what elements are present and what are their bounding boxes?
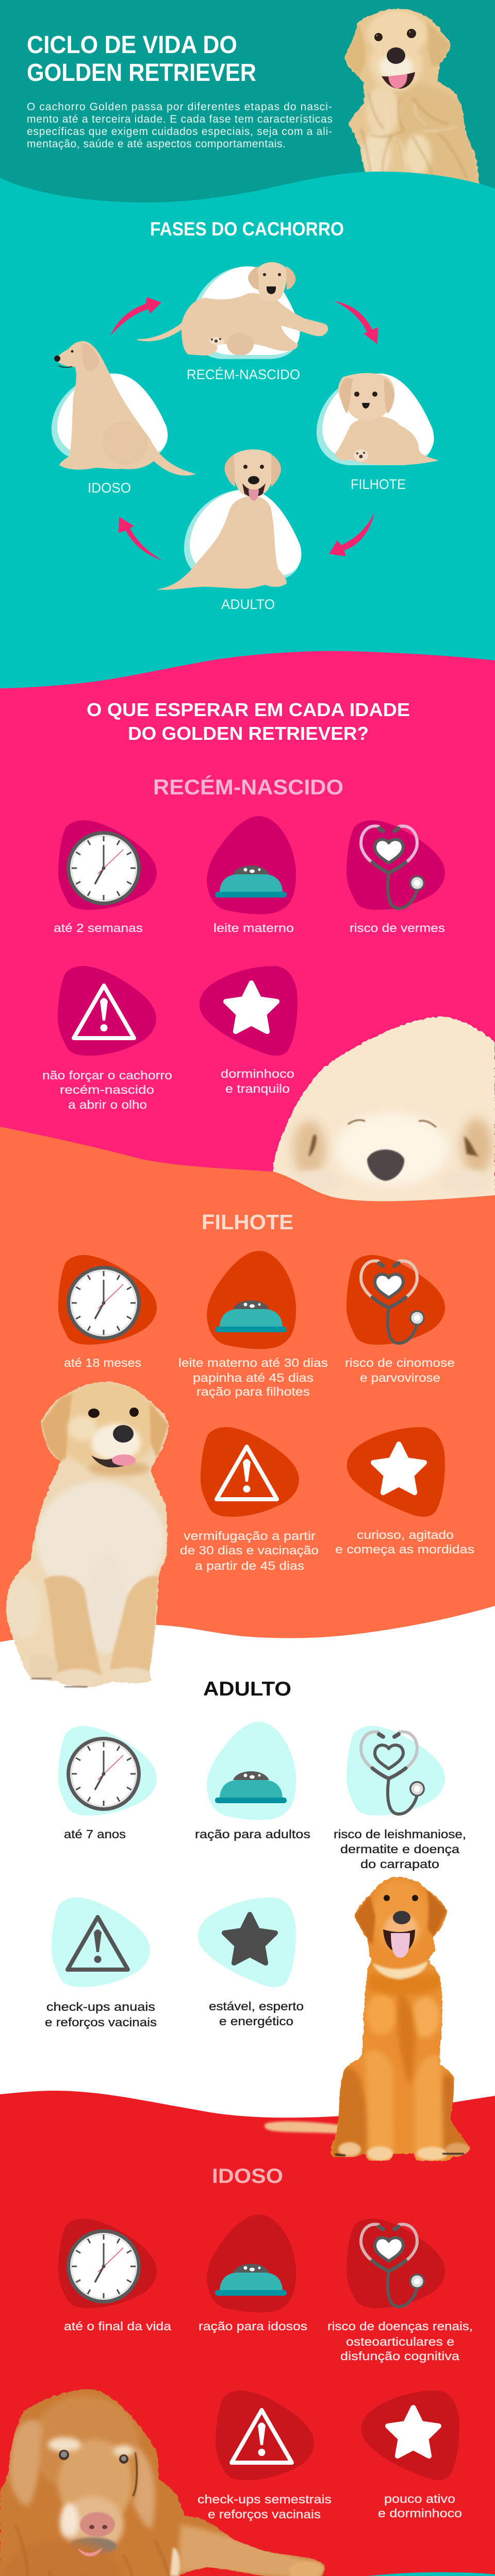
label: alimentação: ração para idosos [199, 2319, 307, 2333]
photo: golden puppy [5, 1381, 169, 1687]
label: saúde: disfunção cognitiva [340, 2349, 459, 2363]
label: saúde: risco de vermes [350, 921, 445, 935]
intro paragraph: mentação, saúde e até aspectos comportamentais. [27, 138, 286, 150]
phase: filhote [317, 373, 439, 492]
icon: stethoscope [346, 2218, 445, 2308]
label: comportamento: dorminhoco [221, 1067, 294, 1080]
label: saúde: risco de leishmaniose, [334, 1827, 466, 1841]
panel: idoso [58, 2165, 473, 2521]
label: cuidado: e reforços vacinais [45, 2015, 157, 2029]
photo: golden retriever header [344, 9, 480, 185]
label: alimentação: ração para filhotes [196, 1385, 310, 1398]
label: comportamento [335, 1528, 474, 1556]
label: saúde: e parvovirose [360, 1371, 440, 1384]
intro paragraph: específicas que exigem cuidados especiais, seja com a ali- [27, 126, 332, 138]
heading: RECÉM-NASCIDO [153, 775, 343, 799]
panel: red senior background [0, 2091, 495, 2576]
label: saúde: dermatite e doença [340, 1842, 459, 1856]
label: alimentação: ração para adultos [195, 1827, 310, 1841]
label: idade: até 2 semanas [54, 921, 143, 935]
panel: pink newborn background [0, 651, 495, 1236]
title: CICLO DE VIDA DO [27, 31, 237, 59]
label: cuidado [197, 2493, 332, 2521]
label: alimentação: papinha até 45 dias [193, 1371, 314, 1384]
title [27, 31, 256, 87]
title: GOLDEN RETRIEVER [27, 59, 256, 87]
icon: star [200, 966, 298, 1056]
panel: recém-nascido [42, 775, 445, 1111]
label: comportamento [221, 1067, 294, 1095]
tail [265, 2122, 343, 2134]
label: cuidado: check-ups semestrais [197, 2493, 332, 2506]
label: idade: até 7 anos [64, 1827, 126, 1841]
label: comportamento [209, 1999, 304, 2028]
arrow: recém-nascido to filhote [334, 301, 378, 344]
intro paragraph [27, 101, 333, 150]
intro paragraph: mento até a terceira idade. E cada fase tem características [27, 113, 333, 125]
photo: sleeping puppy [271, 1016, 495, 1206]
label: cuidado: recém-nascido [60, 1083, 154, 1096]
panel: o que esperar heading: O QUE ESPERAR EM CADA IDADE [87, 699, 410, 720]
label: cuidado [180, 1529, 319, 1572]
icon: star [361, 2391, 459, 2480]
label: comportamento: estável, esperto [209, 1999, 304, 2013]
label: cuidado: e reforços vacinais [208, 2507, 321, 2521]
label: cuidado: vermifugação a partir [184, 1529, 316, 1543]
label: idade: até o final da vida [64, 2319, 171, 2333]
photo: senior golden retriever [0, 2389, 324, 2576]
icon: clock [58, 1255, 157, 1345]
label: cuidado [42, 1069, 172, 1111]
phase: adulto [156, 449, 302, 612]
phase: idoso [52, 341, 196, 496]
icon: bowl [207, 816, 296, 914]
label: comportamento: pouco ativo [384, 2492, 455, 2505]
label: saúde [334, 1827, 466, 1871]
icon: clock [58, 2218, 157, 2308]
panel: header text [27, 31, 333, 150]
arrow: idoso to recém-nascido [110, 297, 161, 336]
phase: recém-nascido [137, 262, 328, 382]
heading: IDOSO [212, 2165, 283, 2188]
icon: clock [58, 1726, 157, 1816]
label: IDOSO [88, 480, 131, 496]
panel: adulto [45, 1678, 466, 2029]
label: cuidado: check-ups anuais [46, 2000, 155, 2013]
photo: adult golden retriever [265, 1877, 472, 2161]
arrow: filhote to adulto [329, 512, 374, 556]
label: saúde: risco de cinomose [345, 1356, 455, 1369]
heading: ADULTO [203, 1678, 291, 1700]
icon: warning [58, 966, 156, 1056]
label: saúde: osteoarticulares e [346, 2335, 454, 2348]
panel: life phases cycle [52, 218, 439, 612]
panel: filhote [58, 1210, 474, 1572]
panel: o que esperar heading [87, 699, 410, 744]
icon: star [198, 1897, 296, 1987]
label: comportamento: e energético [219, 2014, 293, 2028]
label: cuidado: a partir de 45 dias [195, 1559, 304, 1572]
heading: fases do cachorro: FASES DO CACHORRO [150, 218, 344, 240]
icon: warning [52, 1897, 150, 1987]
label: alimentação [178, 1356, 328, 1398]
icon: star [347, 1427, 445, 1517]
icon: bowl [207, 1722, 296, 1820]
label: RECÉM-NASCIDO [187, 367, 300, 382]
label: comportamento: curioso, agitado [357, 1528, 454, 1541]
label: saúde: risco de doenças renais, [327, 2319, 473, 2333]
arrow: adulto to idoso [119, 517, 162, 561]
label: alimentação: leite materno até 30 dias [178, 1356, 328, 1369]
label: saúde [345, 1356, 455, 1384]
label: alimentação: leite materno [213, 921, 294, 935]
label: comportamento: e dorminhoco [378, 2506, 462, 2520]
label: saúde [327, 2319, 473, 2363]
panel: o que esperar heading: DO GOLDEN RETRIEVER? [128, 723, 369, 744]
label: FILHOTE [351, 477, 406, 492]
label: cuidado: de 30 dias e vacinação [180, 1544, 319, 1557]
panel: header background [0, 0, 495, 216]
icon: stethoscope [346, 1726, 445, 1816]
heading: FILHOTE [202, 1210, 293, 1234]
icon: warning [216, 2391, 314, 2480]
panel: white adult background [0, 1606, 495, 2164]
label: cuidado: a abrir o olho [68, 1098, 147, 1111]
label: cuidado [45, 2000, 157, 2029]
label: saúde: do carrapato [360, 1857, 439, 1871]
intro paragraph: O cachorro Golden passa por diferentes etapas do nasci- [27, 101, 332, 113]
panel: teal footer wave [196, 2572, 495, 2576]
icon: stethoscope [346, 1255, 445, 1345]
panel: teal phases background [0, 172, 495, 721]
label: comportamento [378, 2492, 462, 2520]
label: cuidado: não forçar o cachorro [42, 1069, 172, 1082]
icon: bowl [207, 1251, 296, 1349]
label: comportamento: e tranquilo [225, 1082, 290, 1095]
panel: orange puppy background [0, 1127, 495, 1700]
label: idade: até 18 meses [64, 1356, 141, 1369]
icon: bowl [207, 2214, 296, 2312]
icon: stethoscope [346, 820, 445, 910]
label: comportamento: e começa as mordidas [335, 1543, 474, 1556]
icon: clock [58, 820, 157, 910]
label: ADULTO [221, 597, 275, 612]
icon: warning [201, 1427, 299, 1517]
